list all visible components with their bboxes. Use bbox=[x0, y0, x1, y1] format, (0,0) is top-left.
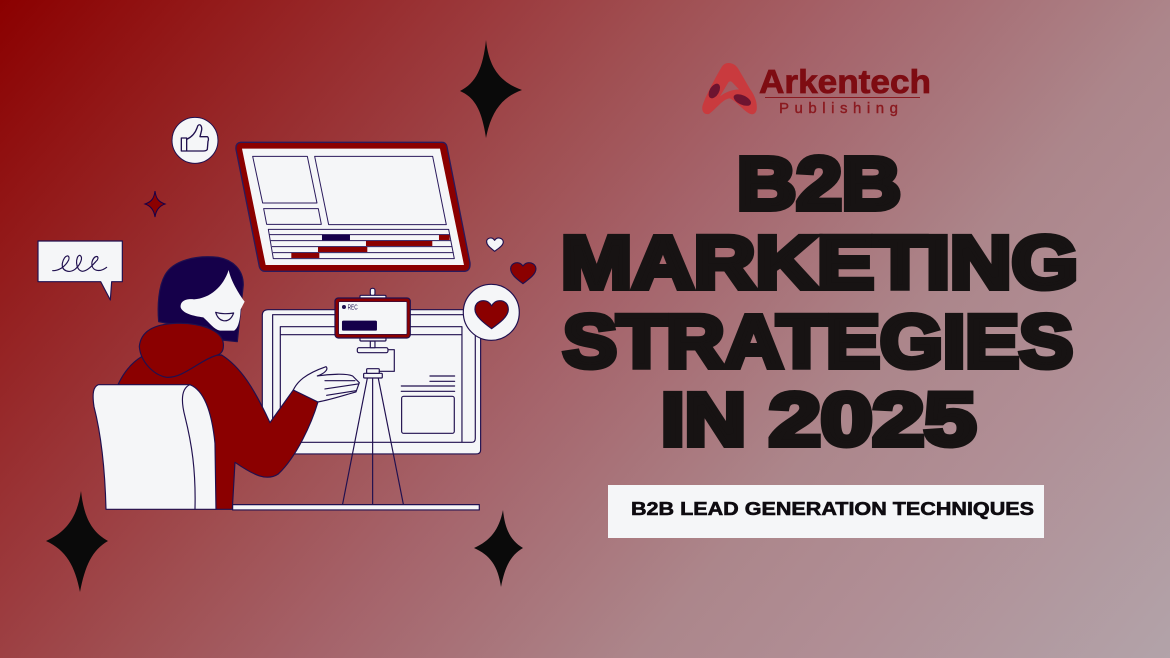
face bbox=[181, 270, 245, 331]
logo tagline: Publishing bbox=[779, 100, 898, 117]
desk bbox=[233, 505, 479, 510]
icon: large sparkle bottom left bbox=[46, 491, 108, 592]
speech bubble bbox=[38, 241, 122, 300]
hand bbox=[293, 367, 359, 402]
icon: small sparkle bbox=[145, 191, 165, 217]
illustration: tilted screen panel bbox=[236, 142, 470, 271]
title: MARKETING bbox=[561, 221, 1078, 304]
phone camera: REC bbox=[348, 303, 358, 312]
logo name: Arkentech bbox=[759, 63, 931, 100]
phone camera bbox=[335, 298, 410, 338]
title: IN bbox=[661, 378, 746, 461]
icon: large sparkle top bbox=[460, 40, 522, 138]
title bbox=[561, 142, 1078, 461]
title: 2025 bbox=[769, 378, 976, 461]
title: STRATEGIES bbox=[563, 300, 1073, 383]
hood bbox=[139, 323, 223, 377]
logo mark bbox=[702, 63, 757, 114]
subtitle banner bbox=[608, 485, 1044, 538]
smile bbox=[216, 312, 234, 321]
chair bbox=[93, 385, 216, 509]
hoodie body bbox=[118, 355, 318, 509]
tripod bbox=[343, 288, 403, 504]
heart badge bbox=[463, 284, 519, 340]
logo bbox=[702, 63, 931, 117]
floating hearts bbox=[487, 238, 536, 284]
title: B2B bbox=[737, 142, 901, 225]
hair bbox=[158, 257, 243, 342]
subtitle banner: B2B LEAD GENERATION TECHNIQUES bbox=[631, 499, 1034, 519]
icon: sparkle bottom center bbox=[474, 510, 523, 587]
icon: thumbs up badge bbox=[172, 117, 218, 163]
illustration: person at desk with monitor and camera bbox=[38, 238, 536, 510]
monitor bbox=[262, 310, 481, 454]
